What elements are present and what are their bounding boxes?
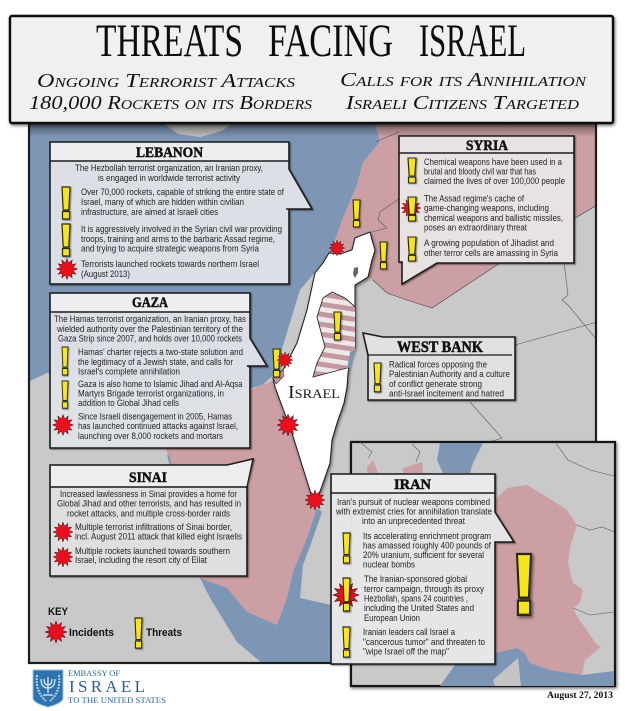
text: terror organizations: addition to Global Jihad cells <box>78 398 179 408</box>
icon: threat <box>343 533 350 563</box>
text: enrichment: nuclear bombs <box>363 560 415 570</box>
icon: incident <box>53 522 73 542</box>
map: Cyprus land <box>165 124 230 137</box>
text: terror campaign: Hezbollah, spans 24 countries , <box>364 594 468 604</box>
logo: embassy wordmark: TO THE UNITED STATES <box>68 696 166 705</box>
text: Sinai intro: Increased lawlessness in Sinai provides a home for <box>60 489 237 499</box>
text: Jihadist population <box>424 238 558 258</box>
icon: threat <box>62 347 68 375</box>
icon: incident <box>53 547 73 567</box>
text: Iranian leaders <box>363 627 485 656</box>
text: continued attacks: Since Israeli disengagement in 2005, Hamas <box>78 412 232 422</box>
subtitle: right column: Israeli Citizens Targeted <box>345 92 579 114</box>
text: Iranian leaders: Iranian leaders call Israel a <box>363 627 455 637</box>
subtitle: right column: Calls for its Annihilation <box>340 69 587 91</box>
text: enrichment: 20% uranium, sufficient for several <box>363 550 484 560</box>
text: northern rockets: Terrorists launched rockets towards northern Israel <box>81 259 259 269</box>
text: rockets: Israel, many of which are hidden within civilian <box>81 197 244 207</box>
text: Hamas charter: Hamas' charter rejects a two-state solution and <box>78 347 243 357</box>
title: FACING <box>268 15 393 67</box>
map: Red Sea and gulfs <box>200 508 335 664</box>
subtitle: left column <box>29 70 312 114</box>
text: Syrian war involvement <box>81 224 282 254</box>
text: continued attacks: has launched continued attacks against Israel, <box>78 421 238 431</box>
subtitle: left column: Ongoing Terrorist Attacks <box>37 70 295 92</box>
text: Iran intro: Iran's pursuit of nuclear weapons combined <box>337 497 490 507</box>
key: threats label: Threats <box>146 627 182 639</box>
text: southern rockets <box>75 546 230 565</box>
icon: threat <box>343 627 350 657</box>
Caucasus territory <box>367 460 423 473</box>
text: rockets: Over 70,000 rockets, capable of striking the entire state of <box>81 187 284 197</box>
Sea of Galilee <box>353 267 358 278</box>
text: terror campaign: terror campaign, through its proxy <box>364 584 484 594</box>
text: Assad cache: The Assad regime's cache of <box>424 194 524 204</box>
text: West Bank details: Radical forces opposing the <box>389 360 487 370</box>
title: THREATS <box>96 15 243 67</box>
text: Syrian war involvement: and trying to acquire strategic weapons from Syria <box>81 244 259 254</box>
text: chemical weapons: brutal and bloody civil war that has <box>424 166 536 176</box>
West Bank striped territory <box>312 292 355 378</box>
heading: Sinai: SINAI <box>129 470 167 486</box>
text: Gaza intro: wielded authority over the Palestinian territory of the <box>56 324 243 334</box>
text: continued attacks: launching over 8,000 rockets and mortars <box>78 431 223 441</box>
key: threat icon <box>135 618 142 648</box>
text: infiltrations: Multiple terrorist infiltrations of Sinai border, <box>75 522 232 532</box>
text: Iran intro: into an unprecedented threat <box>362 516 465 526</box>
Israel landmass <box>273 232 375 497</box>
logo: embassy wordmark: EMBASSY OF <box>68 669 121 678</box>
map frame <box>29 123 596 663</box>
Caspian Sea <box>437 443 483 473</box>
text: West Bank details: of conflict generate strong <box>389 379 482 389</box>
map incident icons <box>277 240 345 510</box>
panel: Sinai <box>50 459 253 576</box>
key heading: KEY <box>48 606 69 618</box>
logo: embassy wordmark <box>68 669 166 705</box>
Dead Sea <box>347 350 355 369</box>
panel: Iran <box>331 474 514 664</box>
text: Assad cache: chemical weapons and ballistic missiles, <box>424 213 563 223</box>
label: Israel: Israel <box>288 382 340 402</box>
Iran inset map <box>351 442 615 686</box>
text: West Bank details: anti-Israel incitement and hatred <box>389 388 504 398</box>
subtitle: right column <box>340 69 587 114</box>
icon: threat <box>62 381 68 408</box>
text: Sinai intro: rocket attacks, and multiple cross-border raids <box>67 508 230 518</box>
heading: Lebanon: LEBANON <box>136 145 203 161</box>
map: Sinai territory <box>163 380 317 625</box>
icon: threat <box>408 237 416 261</box>
logo: embassy emblem <box>33 670 63 707</box>
text: terror campaign: including the United States and <box>364 603 474 613</box>
text: continued attacks <box>78 412 238 441</box>
text: rockets: infrastructure, are aimed at Israeli cities <box>81 207 218 217</box>
key: incidents label: Incidents <box>69 627 114 639</box>
title: ISRAEL <box>419 15 526 67</box>
text: Hamas charter: the legitimacy of a Jewish state, and calls for <box>78 357 233 367</box>
icon: threat and incident <box>333 578 359 611</box>
text: Iran intro <box>335 497 492 526</box>
heading: West Bank: WEST BANK <box>397 339 483 356</box>
text: Jihadist population: other terror cells are amassing in Syria <box>424 248 558 258</box>
heading: Syria: SYRIA <box>466 138 508 154</box>
key: incident icon <box>45 621 67 643</box>
Iran territory <box>495 485 601 675</box>
panel: Gaza <box>50 293 267 448</box>
text: Hamas charter: Israel's complete annihilation <box>78 366 180 376</box>
text: Sinai intro: Global Jihad and other terrorists, and has resulted in <box>57 498 241 508</box>
text: Assad cache: game-changing weapons, including <box>424 203 549 213</box>
text: northern rockets <box>81 259 259 279</box>
map threat icons <box>273 200 531 615</box>
text: Hamas charter <box>78 347 243 376</box>
map: top inner shadow <box>30 124 595 136</box>
text: Jihadist population: A growing population of Jihadist and <box>424 238 554 248</box>
text: chemical weapons <box>424 157 565 186</box>
text: infiltrations <box>75 522 242 542</box>
Persian Gulf <box>440 648 614 686</box>
title <box>96 15 526 67</box>
icon: threat and incident <box>401 197 421 221</box>
heading: Gaza: GAZA <box>132 295 168 311</box>
icon: threat <box>62 224 70 256</box>
logo: embassy wordmark: ISRAEL <box>69 677 145 696</box>
Arabian peninsula land <box>493 658 521 686</box>
text: Syrian war involvement: troops, training and arms to the barbaric Assad regime, <box>81 234 275 244</box>
text: terror organizations <box>78 379 242 408</box>
map: Mediterranean sea <box>28 123 380 400</box>
Iran neighbouring borders <box>360 442 614 615</box>
text: Gaza intro: Gaza Strip since 2007, and holds over 10,000 rockets <box>58 334 242 344</box>
text: enrichment <box>363 531 491 570</box>
text: southern rockets: Multiple rockets launched towards southern <box>75 546 230 556</box>
text: Iran intro: with extremist cries for annihilation translate <box>335 506 492 516</box>
map: country borders <box>168 132 597 500</box>
text: Syrian war involvement: It is aggressively involved in the Syrian civil war providing <box>81 224 282 234</box>
text: Assad cache: poses an extraordinary threat <box>424 222 527 232</box>
key <box>45 606 182 648</box>
text: West Bank details <box>389 360 510 398</box>
text: terror organizations: Martyrs Brigade terrorist organizations, in <box>78 388 224 398</box>
map: Syria and Lebanon territory <box>335 123 597 308</box>
text: chemical weapons: Chemical weapons have been used in a <box>424 157 562 167</box>
text: terror campaign <box>364 574 484 623</box>
text: Lebanon intro: is engaged in worldwide terrorist activity <box>98 173 240 183</box>
text: terror campaign: The Iranian-sponsored global <box>364 574 467 584</box>
panel: Syria <box>399 136 574 284</box>
text: Gaza intro: The Hamas terrorist organization, an Iranian proxy, has <box>54 314 246 324</box>
icon: threat <box>62 187 70 219</box>
text: enrichment: Its accelerating enrichment program <box>363 531 491 541</box>
text: Lebanon intro <box>75 163 263 183</box>
map: region base <box>28 123 597 664</box>
panel: West Bank <box>363 333 515 400</box>
text: southern rockets: Israel, including the resort city of Eilat <box>75 555 207 565</box>
text: Iranian leaders: "cancerous tumor" and threaten to <box>363 637 485 647</box>
title panel <box>10 15 613 123</box>
text: Lebanon intro: The Hezbollah terrorist organization, an Iranian proxy, <box>75 163 263 173</box>
date: August 27, 2013 <box>547 691 613 701</box>
text: terror campaign: European Union <box>364 613 420 623</box>
text: terror organizations: Gaza is also home to Islamic Jihad and Al-Aqsa <box>78 379 242 389</box>
text: infiltrations: incl. August 2011 attack that killed eight Israelis <box>75 532 242 542</box>
text: chemical weapons: claimed the lives of over 100,000 people <box>424 176 565 186</box>
text: Assad cache <box>424 194 563 232</box>
text: West Bank details: Palestinian Authority and a culture <box>389 369 510 379</box>
icon: incident <box>56 258 78 280</box>
text: Sinai intro <box>57 489 241 518</box>
icon: threat <box>408 158 416 183</box>
icon: incident <box>52 414 74 436</box>
icon: threat <box>374 363 381 392</box>
text: enrichment: has amassed roughly 400 pounds of <box>363 540 491 550</box>
text: rockets <box>81 187 284 217</box>
text: northern rockets: (August 2013) <box>81 269 130 279</box>
text: Iranian leaders: "wipe Israel off the map" <box>363 646 449 656</box>
text: Gaza intro <box>54 314 246 344</box>
subtitle: left column: 180,000 Rockets on its Borders <box>29 92 312 114</box>
Gaza Strip <box>273 370 284 384</box>
heading: Iran: IRAN <box>394 477 431 493</box>
panel: Lebanon <box>50 142 312 284</box>
